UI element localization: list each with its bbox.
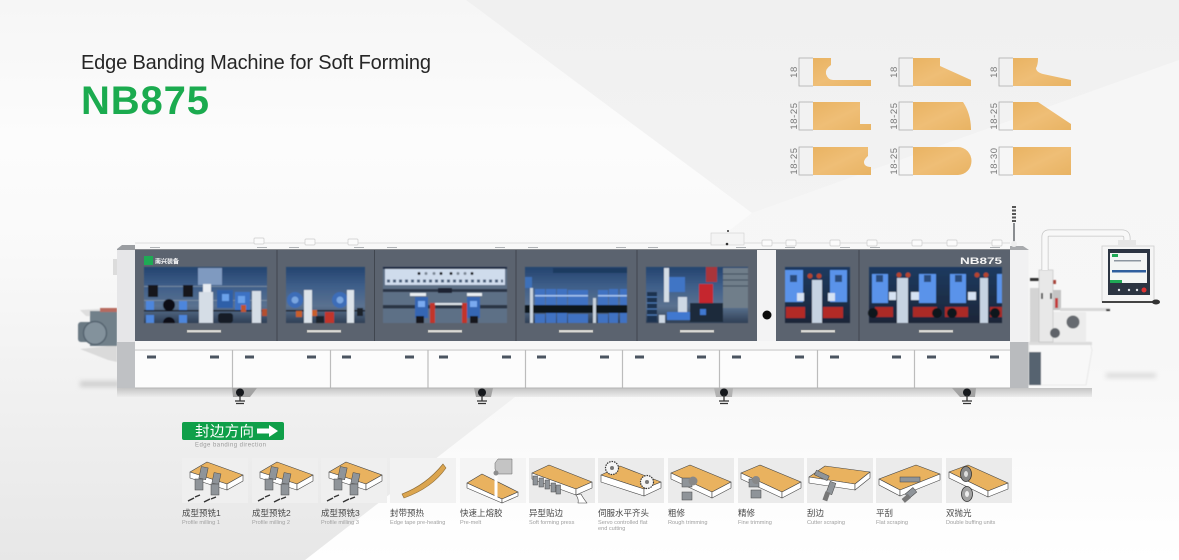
step 5 pre-melt xyxy=(460,458,526,526)
step 10 cutter scraping xyxy=(807,458,873,526)
profile 18-25 round xyxy=(889,147,972,175)
foot 3 xyxy=(714,388,733,404)
step 7 servo flat end cutting: end cutting xyxy=(598,526,625,532)
step 2 profile milling 2: 成型预铣2 xyxy=(252,508,291,518)
feet xyxy=(232,388,976,404)
step 11 flat scraping: 平刮 xyxy=(876,508,893,518)
step 3 profile milling 3: Profile milling 3 xyxy=(321,520,359,526)
step 9 fine trimming: Fine trimming xyxy=(738,520,772,526)
window 5 xyxy=(646,267,748,323)
heading: model NB875: NB875 xyxy=(81,79,209,123)
step 12 double buffing units: 双抛光 xyxy=(946,508,972,518)
step 4 edge tape pre-heating: Edge tape pre-heating xyxy=(390,520,445,526)
step 8 rough trimming: Rough trimming xyxy=(668,520,707,526)
window 3 xyxy=(383,267,507,323)
step 2 profile milling 2 xyxy=(252,458,318,526)
profile 18-25 chamfer: 18-25 xyxy=(989,102,1000,130)
machine illustration xyxy=(78,206,1160,404)
window 6 xyxy=(785,267,850,323)
step 12 double buffing units xyxy=(946,458,1012,526)
profile 18 curved notch xyxy=(789,58,871,86)
profile 18-25 step xyxy=(789,102,871,130)
foot 2 xyxy=(474,388,493,404)
beacon light xyxy=(1011,206,1017,247)
profile 18-25 step: 18-25 xyxy=(789,102,800,130)
profile 18-25 groove xyxy=(789,147,871,175)
step 5 pre-melt: 快速上熔胶 xyxy=(460,508,503,518)
profile 18 step slope xyxy=(889,58,971,86)
right end column xyxy=(1010,246,1029,388)
profile 18-25 convex xyxy=(889,102,971,130)
step 4 edge tape pre-heating: 封带预热 xyxy=(390,508,425,518)
profile 18-25 chamfer xyxy=(989,102,1071,130)
heading: product subtitle: Edge Banding Machine for Soft Forming xyxy=(81,52,431,74)
window 1 xyxy=(144,267,267,323)
top cover and caps xyxy=(135,230,1010,250)
step 11 flat scraping: Flat scraping xyxy=(876,520,908,526)
window 7 xyxy=(868,267,1002,323)
panel: dark glass doors xyxy=(135,250,1010,341)
left motor xyxy=(78,308,117,362)
control screen xyxy=(1102,240,1160,304)
foot 1 xyxy=(232,388,257,404)
step 6 soft forming press: Soft forming press xyxy=(529,520,575,526)
step 5 pre-melt: Pre-melt xyxy=(460,520,482,526)
direction badge xyxy=(182,422,284,440)
step 9 fine trimming: 精修 xyxy=(738,508,756,518)
brand logo: 南兴装备 xyxy=(155,258,179,266)
step 7 servo flat end cutting: 伺服水平齐头 xyxy=(598,508,650,518)
profile 18 step slope: 18 xyxy=(889,66,900,78)
machine shadow xyxy=(80,373,1156,397)
step 3 profile milling 3 xyxy=(321,458,387,526)
right infeed unit xyxy=(1029,270,1110,385)
profile 18-25 convex: 18-25 xyxy=(889,102,900,130)
step 7 servo flat end cutting xyxy=(598,458,664,532)
step 10 cutter scraping: 刮边 xyxy=(807,508,825,518)
profile 18-25 groove: 18-25 xyxy=(789,147,800,175)
step 9 fine trimming xyxy=(738,458,804,526)
profile 18 curved slope xyxy=(989,58,1071,86)
step 1 profile milling 1: 成型预铣1 xyxy=(182,508,221,518)
foot 4 xyxy=(952,388,976,404)
step 6 soft forming press: 异型贴边 xyxy=(529,508,564,518)
brand logo xyxy=(144,256,179,266)
window 4 xyxy=(525,267,627,323)
model plate NB875: NB875 xyxy=(960,256,1003,267)
step 6 soft forming press xyxy=(529,458,595,526)
step 3 profile milling 3: 成型预铣3 xyxy=(321,508,360,518)
profile 18-30 square xyxy=(989,147,1071,175)
lower white band and drawers xyxy=(135,341,1010,388)
step 4 edge tape pre-heating xyxy=(390,458,456,526)
step 1 profile milling 1: Profile milling 1 xyxy=(182,520,220,526)
step 1 profile milling 1 xyxy=(182,458,248,526)
step 11 flat scraping xyxy=(876,458,942,526)
panel: process steps xyxy=(182,458,1012,532)
profile 18 curved notch: 18 xyxy=(789,66,800,78)
step 8 rough trimming xyxy=(668,458,734,526)
profile 18-30 square: 18-30 xyxy=(989,147,1000,175)
support arm xyxy=(1045,233,1127,270)
direction badge: 封边方向 xyxy=(195,424,254,440)
step 8 rough trimming: 粗修 xyxy=(668,508,686,518)
step 7 servo flat end cutting: Servo controlled flat xyxy=(598,520,648,526)
direction caption: Edge banding direction xyxy=(195,442,266,448)
icon: direction arrow xyxy=(257,425,278,437)
step 10 cutter scraping: Cutter scraping xyxy=(807,520,845,526)
window 2 xyxy=(286,267,365,323)
step 12 double buffing units: Double buffing units xyxy=(946,520,996,526)
step 2 profile milling 2: Profile milling 2 xyxy=(252,520,290,526)
panel: edge profiles xyxy=(789,58,1071,175)
profile 18-25 round: 18-25 xyxy=(889,147,900,175)
left end column xyxy=(113,245,135,388)
profile 18 curved slope: 18 xyxy=(989,66,1000,78)
